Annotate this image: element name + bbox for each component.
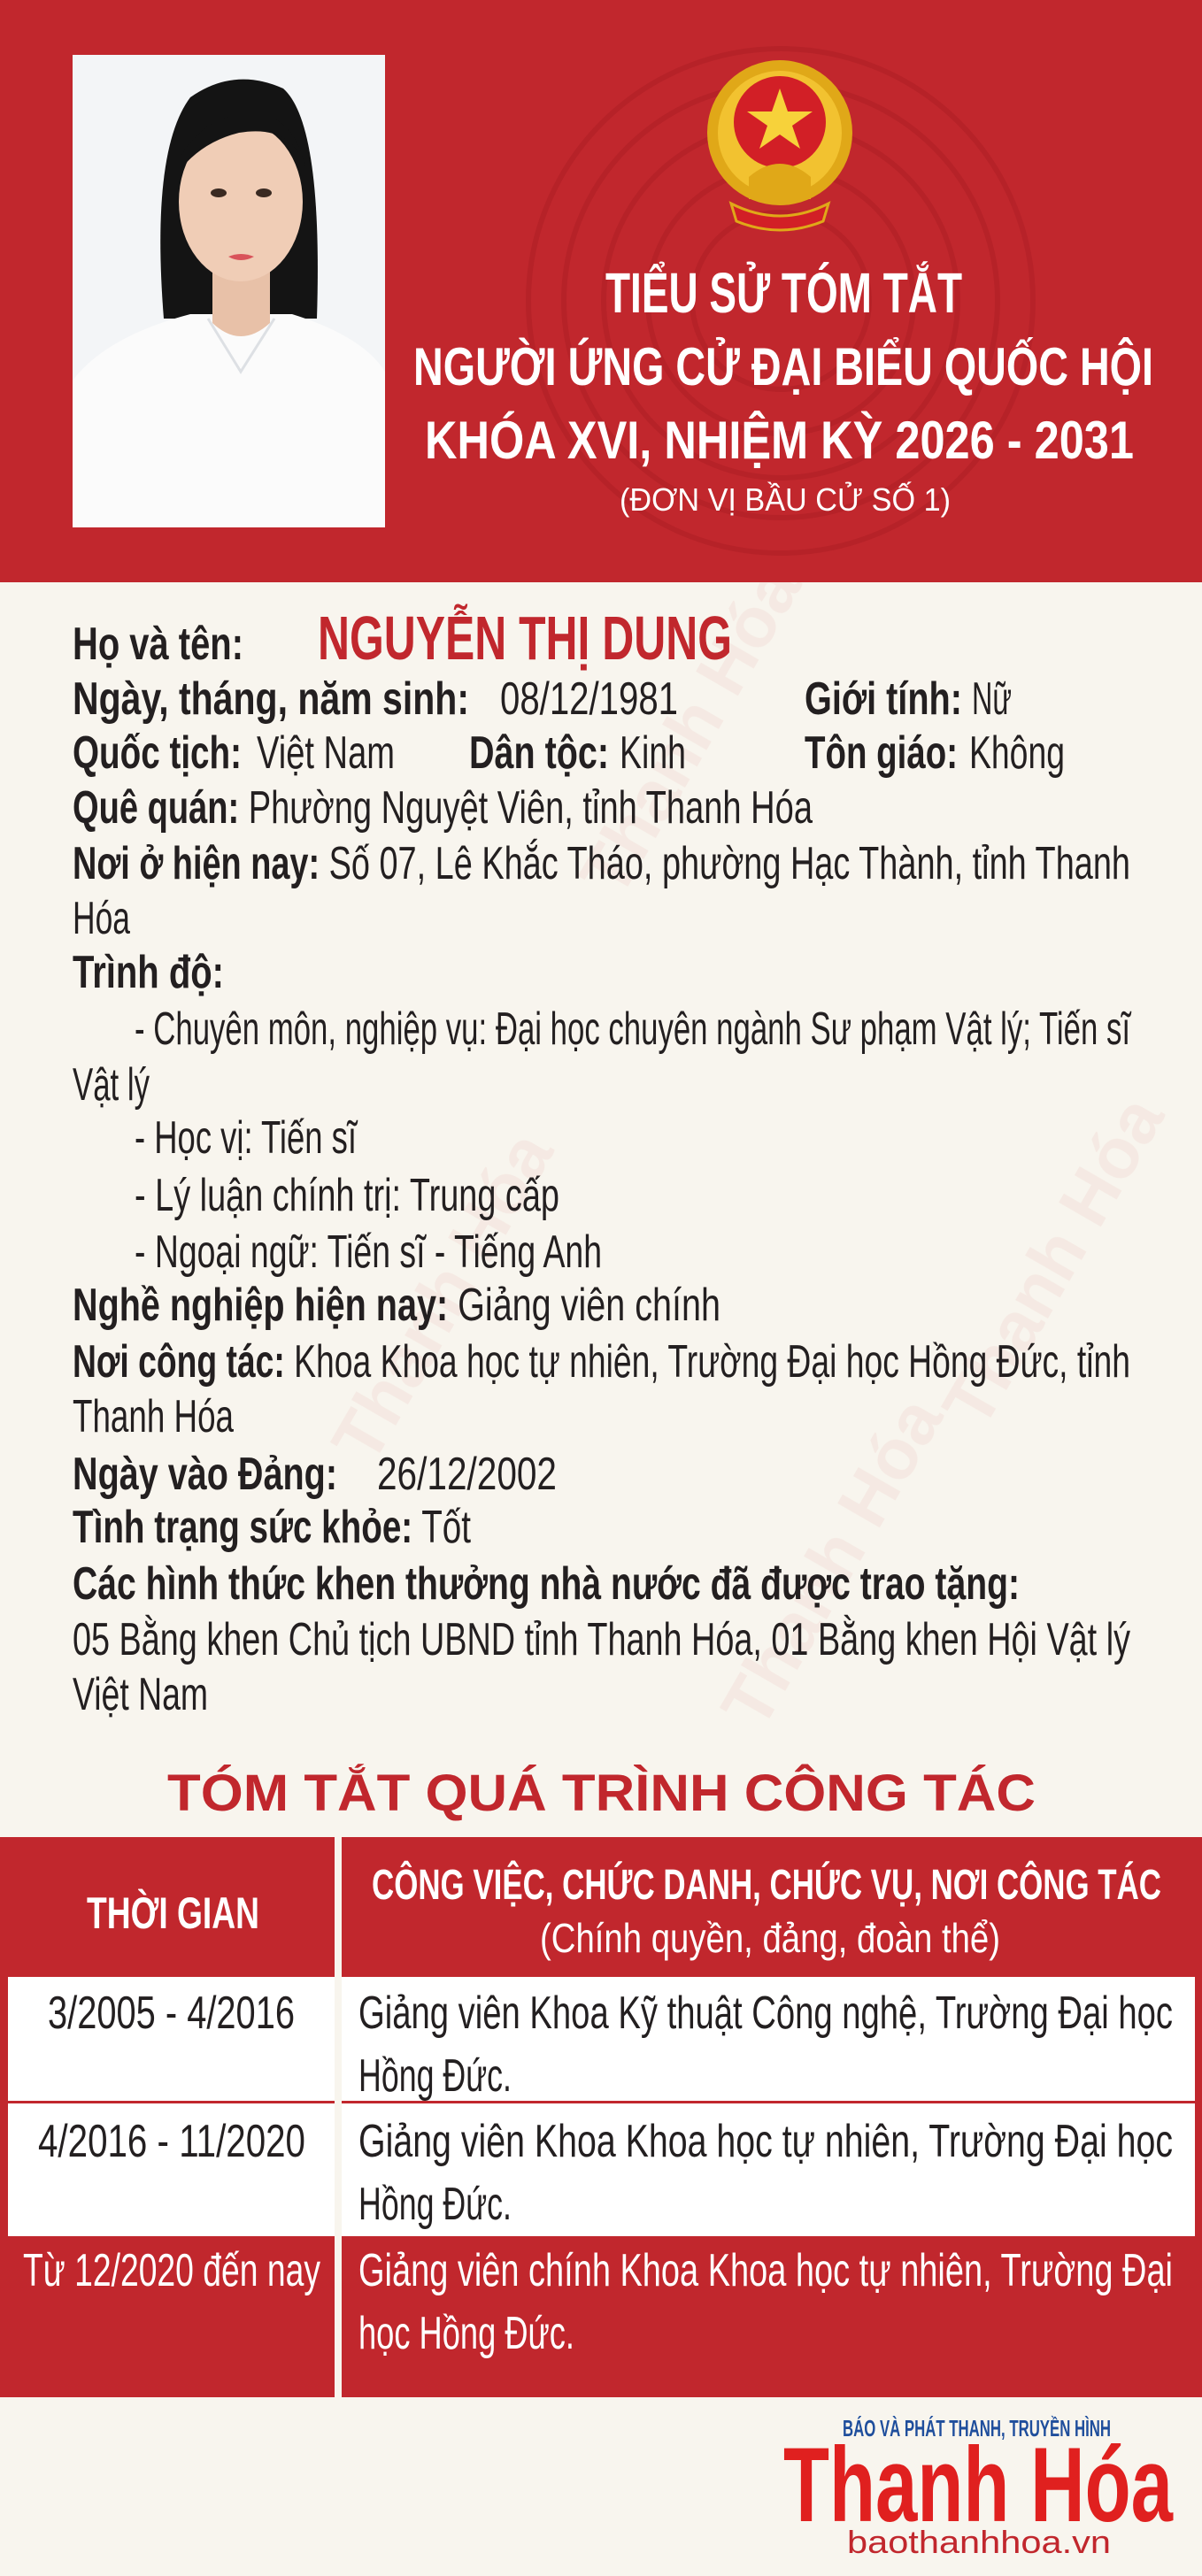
personal info text block: Việt Nam xyxy=(257,727,395,779)
personal info text block: Giới tính: xyxy=(805,673,962,725)
header panel xyxy=(0,0,1202,582)
row 1 xyxy=(48,1988,1173,2102)
personal info text block: Trình độ: xyxy=(73,947,224,998)
personal info text block: Quê quán: Phường Nguyệt Viên, tỉnh Thanh Hóa xyxy=(73,782,813,834)
candidate name: NGUYỄN THỊ DUNG xyxy=(318,603,732,673)
personal info text block: Quốc tịch: xyxy=(73,727,242,779)
row 2: Hồng Đức. xyxy=(358,2179,512,2230)
photo xyxy=(73,55,385,527)
row 1: 3/2005 - 4/2016 xyxy=(48,1988,295,2039)
row 1: Hồng Đức. xyxy=(358,2050,512,2102)
personal info text block: Kinh xyxy=(620,727,686,779)
title xyxy=(413,260,1153,470)
section heading: work history: TÓM TẮT QUÁ TRÌNH CÔNG TÁC xyxy=(167,1765,1036,1822)
row 3: học Hồng Đức. xyxy=(358,2308,574,2359)
personal info text block: Thanh Hóa xyxy=(73,1391,234,1442)
personal info text block: Ngày vào Đảng: xyxy=(73,1449,337,1500)
footer logo: baothanhhoa.vn xyxy=(847,2524,1111,2560)
watermarks: Thanh Hóa xyxy=(928,1083,1179,1439)
table header xyxy=(87,1860,1161,1961)
personal info text block: Họ và tên: xyxy=(73,619,243,670)
subtitle: (ĐƠN VỊ BẦU CỬ SỐ 1) xyxy=(620,481,951,518)
watermarks: Thanh Hóa xyxy=(706,1384,958,1740)
personal info text block: Không xyxy=(969,727,1065,779)
icon: national emblem xyxy=(707,60,852,230)
personal info text block: Dân tộc: xyxy=(469,727,609,779)
personal info text block: Tôn giáo: xyxy=(805,727,958,779)
row 2 xyxy=(38,2116,1173,2230)
row 3 xyxy=(23,2245,1173,2359)
personal info text block: Nghề nghiệp hiện nay: Giảng viên chính xyxy=(73,1280,720,1331)
personal info text block: Tình trạng sức khỏe: Tốt xyxy=(73,1502,471,1553)
watermarks xyxy=(317,582,1179,1740)
personal info text block: - Học vị: Tiến sĩ xyxy=(135,1112,358,1164)
table header: (Chính quyền, đảng, đoàn thể) xyxy=(540,1915,1000,1961)
watermarks: Thanh Hóa xyxy=(317,1119,568,1474)
table: work history xyxy=(0,1837,1202,2397)
personal info text block xyxy=(73,603,1132,1720)
background drum motif xyxy=(528,49,1033,553)
title: TIỂU SỬ TÓM TẮT xyxy=(605,260,962,325)
personal info text block: Vật lý xyxy=(73,1059,150,1111)
personal info text block: Nữ xyxy=(972,673,1012,725)
personal info text block: - Lý luận chính trị: Trung cấp xyxy=(135,1170,559,1221)
personal info text block: Việt Nam xyxy=(73,1669,208,1720)
row 3: Từ 12/2020 đến nay xyxy=(23,2245,320,2296)
personal info text block: Hóa xyxy=(73,893,130,944)
personal info text block: - Ngoại ngữ: Tiến sĩ - Tiếng Anh xyxy=(135,1226,602,1278)
personal info text block: Ngày, tháng, năm sinh: xyxy=(73,673,469,725)
table header: THỜI GIAN xyxy=(87,1888,259,1938)
personal info text block: 08/12/1981 xyxy=(500,673,678,725)
personal info text block: 26/12/2002 xyxy=(377,1449,557,1500)
row 2: 4/2016 - 11/2020 xyxy=(38,2116,305,2167)
